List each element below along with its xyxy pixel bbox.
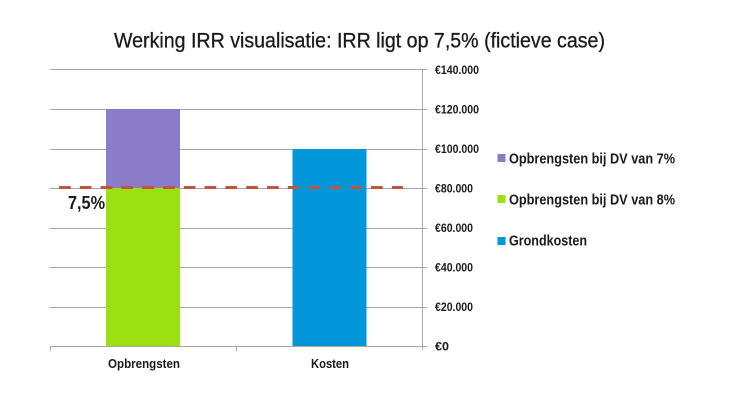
y axis labels: €120.000 [435, 102, 479, 116]
bar: Opbrengsten bij DV van 8% [106, 188, 180, 346]
y axis labels: €0 [435, 340, 449, 354]
y axis labels: €40.000 [435, 260, 473, 274]
y axis labels: €60.000 [435, 221, 473, 235]
x axis labels [108, 356, 349, 371]
y axis labels: €100.000 [435, 142, 479, 156]
y axis labels: €80.000 [435, 182, 473, 196]
legend item: Grondkosten: Grondkosten [509, 234, 587, 250]
bar: Grondkosten [292, 149, 366, 346]
x axis labels: Opbrengsten [108, 356, 180, 371]
label: 7,5%: 7,5% [68, 193, 105, 213]
title: Werking IRR visualisatie: IRR ligt op 7,5% (fictieve case) [114, 28, 605, 52]
IRR dashed line [59, 186, 403, 189]
bar: Opbrengsten bij DV van 7% [106, 109, 180, 188]
legend item: 7%: Opbrengsten bij DV van 7% [509, 152, 675, 168]
y axis labels [435, 63, 479, 354]
y axis labels: €140.000 [435, 63, 479, 77]
legend item: 8%: Opbrengsten bij DV van 8% [509, 192, 675, 208]
y axis labels: €20.000 [435, 300, 473, 314]
legend [498, 152, 675, 250]
x axis labels: Kosten [311, 356, 349, 371]
